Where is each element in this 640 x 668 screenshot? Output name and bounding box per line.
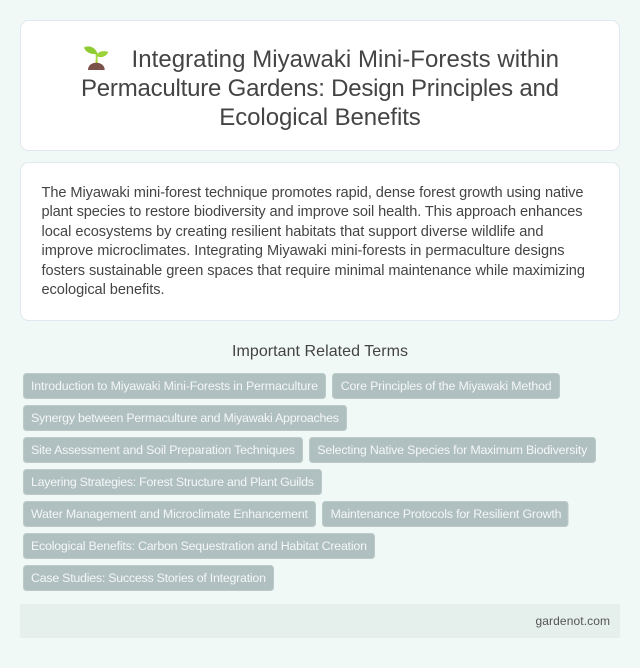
- title: Integrating Miyawaki Mini-Forests within: [132, 46, 559, 73]
- tag: maintenance: [322, 502, 568, 526]
- text block: description: [42, 185, 585, 298]
- tag: ecological benefits: Ecological Benefits: Carbon Sequestration and Habitat Creation: [31, 539, 367, 553]
- tag: core principles: Core Principles of the Miyawaki Method: [341, 379, 552, 393]
- tag: synergy: [24, 406, 346, 430]
- text block: description: ecological benefits.: [42, 282, 164, 298]
- tag: core principles: [332, 374, 560, 398]
- tag: site assessment: Site Assessment and Soil Preparation Techniques: [31, 443, 295, 457]
- footer source text: gardenot.com: [536, 614, 610, 628]
- tag: case studies: [24, 566, 274, 590]
- icon: seedling: [84, 46, 108, 70]
- tag: introduction: [24, 374, 326, 398]
- text block: description: improve microclimates. Integrating Miyawaki mini-forests in permaculture designs: [42, 243, 564, 259]
- tag: case studies: Case Studies: Success Stories of Integration: [31, 571, 266, 585]
- text block: description: The Miyawaki mini-forest technique promotes rapid, dense forest growth using native: [42, 185, 584, 201]
- tag: introduction: Introduction to Miyawaki Mini-Forests in Permaculture: [31, 379, 318, 393]
- tag: maintenance: Maintenance Protocols for Resilient Growth: [330, 507, 562, 521]
- panel: description card: [20, 162, 620, 320]
- title: [81, 46, 559, 131]
- tag: layering: Layering Strategies: Forest Structure and Plant Guilds: [31, 475, 314, 489]
- footer: [20, 604, 620, 638]
- tag: native species: [310, 438, 596, 462]
- panel: title card: [20, 20, 620, 150]
- text block: description: fosters sustainable green spaces that require minimal maintenance while maximizing: [42, 263, 585, 279]
- tag: water management: Water Management and Microclimate Enhancement: [31, 507, 309, 521]
- text block: description: local ecosystems by creating resilient habitats that support diverse wildlife and: [42, 224, 544, 240]
- tag: ecological benefits: [24, 534, 374, 558]
- tag: synergy: Synergy between Permaculture and Miyawaki Approaches: [31, 411, 339, 425]
- related terms tags: [24, 374, 596, 590]
- tag: water management: [24, 502, 316, 526]
- tag: site assessment: [24, 438, 302, 462]
- text block: description: plant species to restore biodiversity and improve soil health. This approach enhances: [42, 204, 582, 220]
- title: Permaculture Gardens: Design Principles and: [81, 75, 559, 102]
- tag: layering: [24, 470, 322, 494]
- title: Ecological Benefits: [219, 104, 421, 131]
- tag: native species: Selecting Native Species for Maximum Biodiversity: [317, 443, 588, 457]
- heading: related terms: Important Related Terms: [232, 343, 408, 360]
